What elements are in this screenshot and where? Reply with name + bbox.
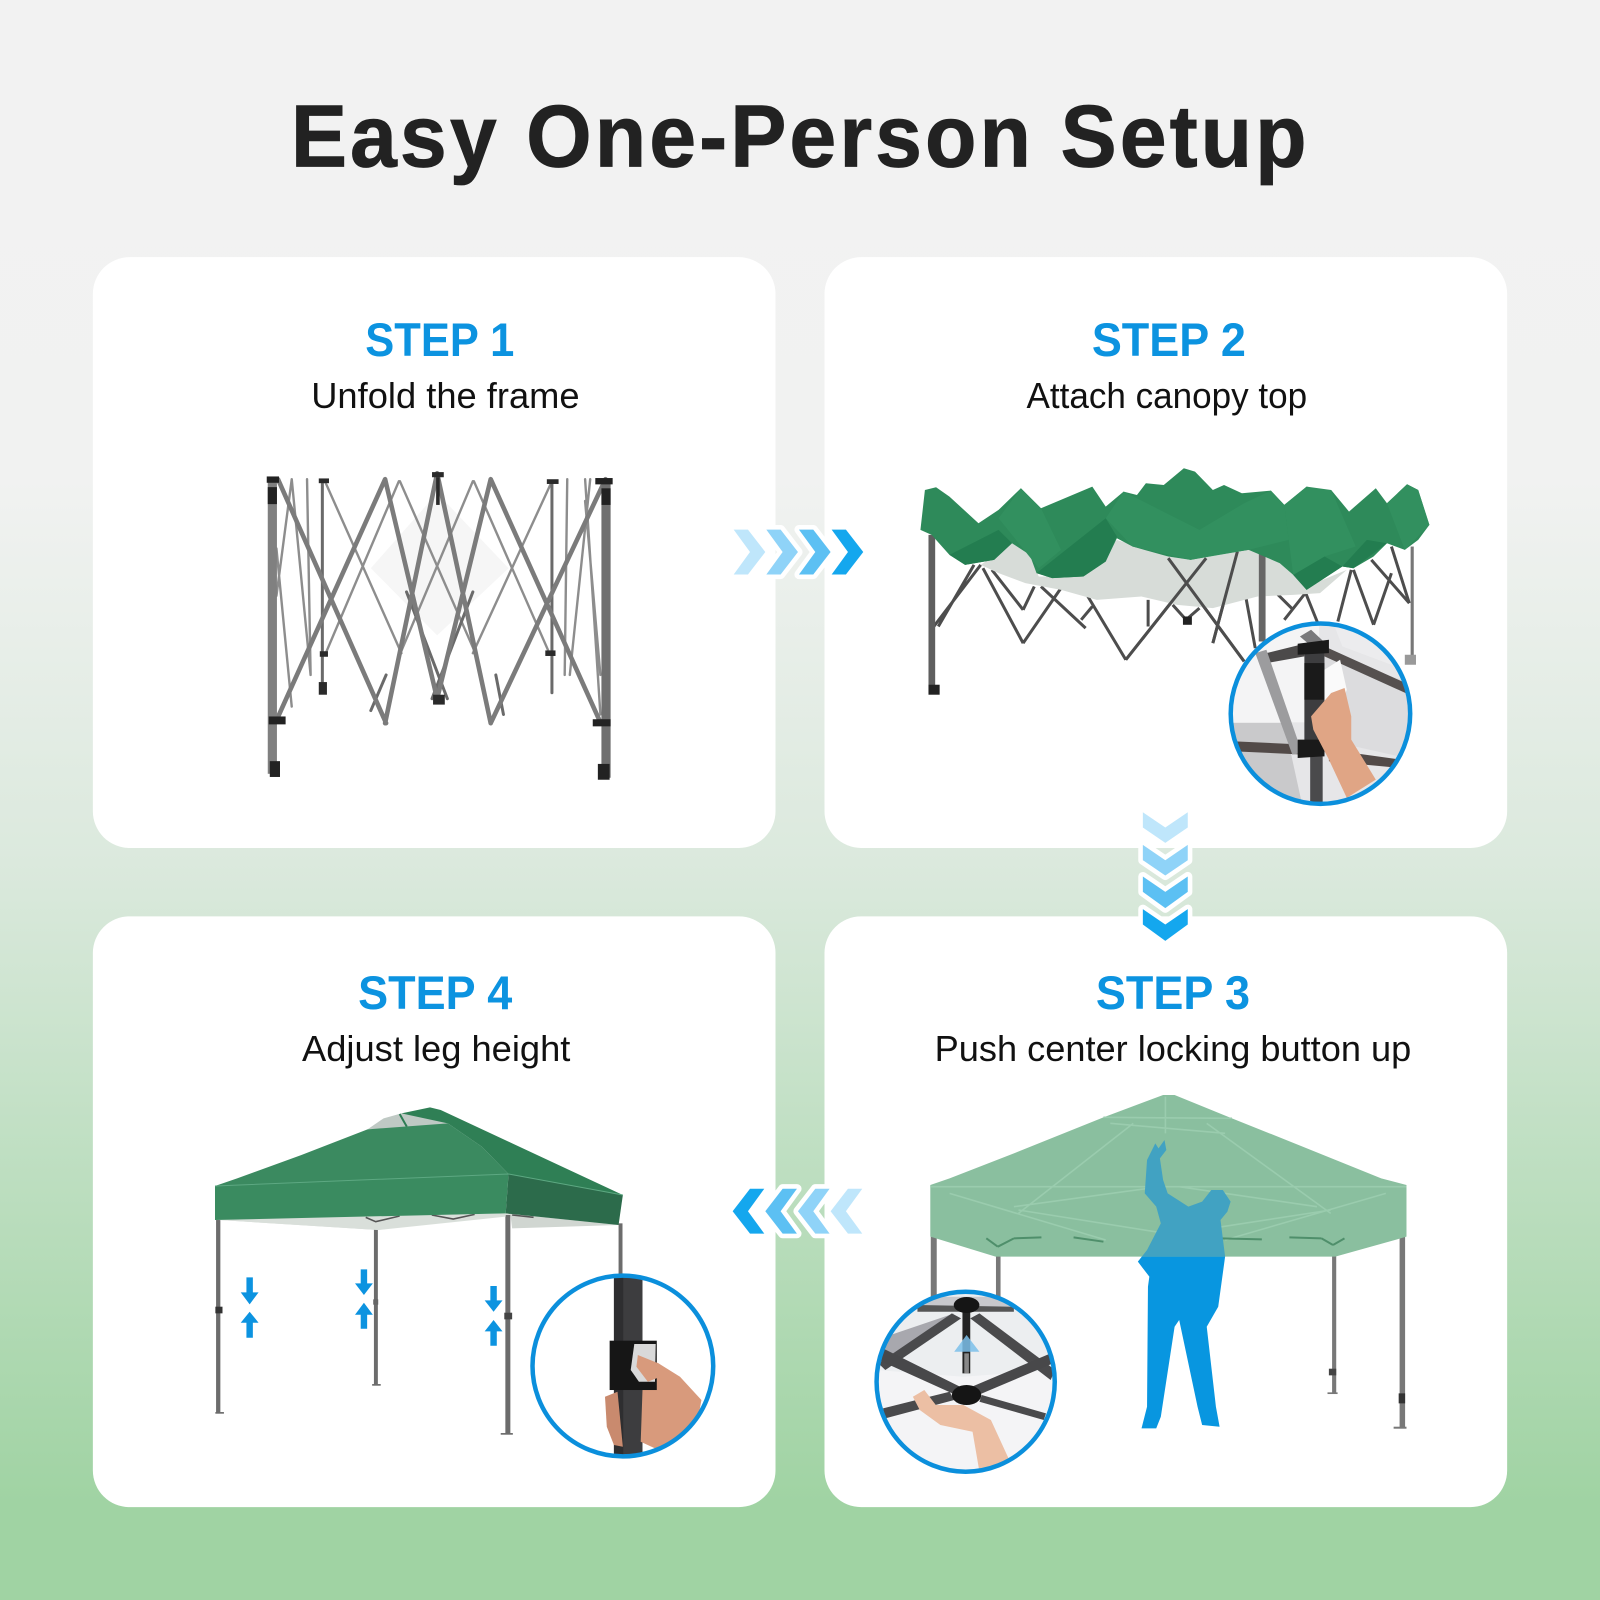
step 2 heading: STEP 2 [1092, 314, 1246, 366]
inset: hand attaching canopy [1230, 622, 1414, 805]
height adjust arrows [241, 1269, 502, 1346]
inset: leg lock button [532, 1275, 714, 1462]
panel: step 2 [824, 257, 1507, 848]
image: unfolded frame [267, 472, 613, 780]
step 2 caption: Attach canopy top [1027, 376, 1307, 416]
translucent canopy [930, 1095, 1406, 1257]
arrow: step 1 to step 2 [734, 530, 863, 574]
step 1 caption: Unfold the frame [311, 376, 580, 416]
arrow: step 2 to step 3 [1143, 812, 1188, 941]
panel: step 1 [93, 257, 776, 848]
title: Easy One-Person Setup [291, 88, 1307, 186]
panel: step 4 [93, 916, 776, 1507]
step 1 heading: STEP 1 [365, 314, 514, 366]
panel: step 3 [824, 916, 1507, 1507]
step 4 caption: Adjust leg height [302, 1029, 570, 1069]
arrow: step 3 to step 4 [733, 1189, 862, 1234]
image: frame with canopy [920, 468, 1429, 805]
step 3 caption: Push center locking button up [935, 1029, 1411, 1069]
image: canopy with person silhouette [876, 1095, 1406, 1473]
step 3 heading: STEP 3 [1096, 967, 1250, 1019]
image: finished canopy [215, 1107, 714, 1462]
person upper part through canopy [1142, 1140, 1230, 1257]
inset: hand pushing locking button [876, 1291, 1056, 1473]
person silhouette [1138, 1140, 1231, 1428]
step 4 heading: STEP 4 [358, 967, 512, 1019]
